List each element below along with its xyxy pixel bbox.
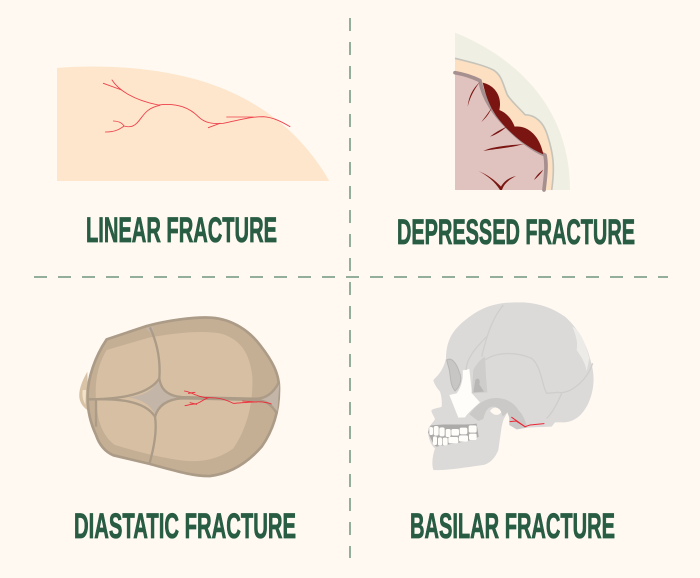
- bone layer: [455, 58, 553, 190]
- brain folds: [468, 82, 543, 190]
- skull inner plates: [96, 332, 252, 461]
- title: diastatic fracture: DIASTATIC FRACTURE: [74, 507, 296, 546]
- illustration: depressed fracture: [455, 33, 570, 190]
- blood pooling: [483, 83, 543, 154]
- fontanelle: [128, 380, 182, 417]
- rear highlight: [572, 327, 589, 371]
- cheek bone highlight: [449, 369, 480, 418]
- red crack lines: [103, 80, 290, 132]
- bone section: [57, 66, 329, 181]
- red crack: [184, 391, 271, 406]
- skull sutures: [466, 305, 593, 418]
- title: linear fracture: LINEAR FRACTURE: [86, 211, 277, 250]
- teeth: [428, 424, 479, 447]
- back of skull nub: [79, 372, 89, 411]
- outer scalp layer: [455, 33, 570, 190]
- skull silhouette: [428, 302, 594, 470]
- eye socket: [447, 359, 461, 391]
- skull outer: [88, 318, 279, 476]
- illustration: basilar fracture skull: [428, 302, 594, 470]
- illustration: linear fracture: [57, 66, 329, 181]
- sutures: [88, 327, 279, 464]
- red crack: [510, 417, 544, 427]
- illustration: diastatic fracture: [79, 318, 279, 476]
- cheek shadow: [469, 398, 527, 429]
- brain tissue: [455, 73, 546, 190]
- membrane outline: [455, 73, 546, 190]
